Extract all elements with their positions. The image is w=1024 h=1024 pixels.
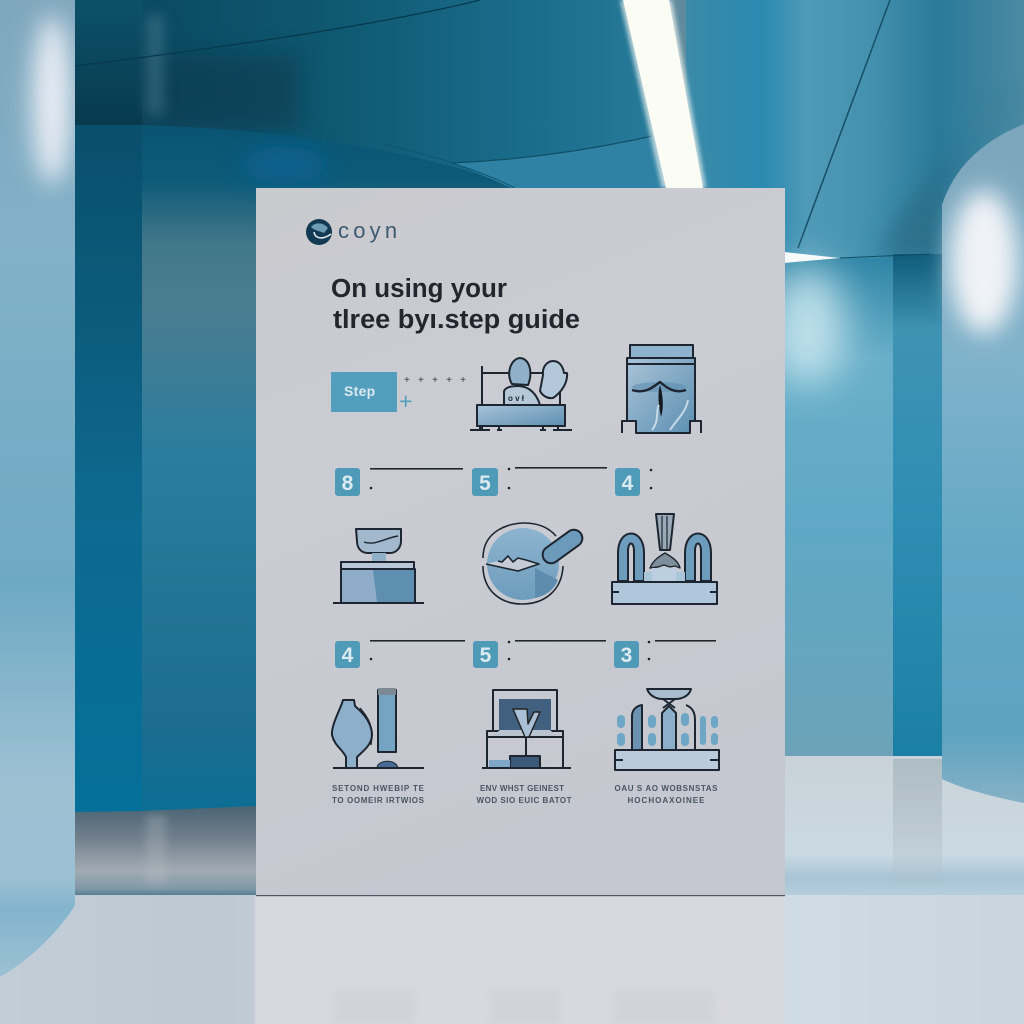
captions <box>332 784 718 805</box>
logo icon <box>306 219 332 245</box>
step row 2 <box>335 640 716 668</box>
logo wordmark: coyn <box>338 218 401 243</box>
icon: vase and bottle <box>332 688 424 768</box>
poster panel <box>256 188 785 896</box>
number 5 <box>473 641 498 668</box>
caption 2: WOD SIO EUIC BATOT <box>476 796 572 805</box>
icon: bench with figures <box>470 358 572 430</box>
icon: circular dish with handle <box>483 523 586 604</box>
left pillar <box>0 0 75 977</box>
floor <box>0 756 1024 1024</box>
icon: bowl on block <box>333 529 424 603</box>
number 5 <box>472 468 498 496</box>
caption 2: ENV WHST GEINEST <box>480 784 564 793</box>
title: On using your <box>331 275 507 303</box>
step row 1 <box>335 467 652 496</box>
number 4: 4 <box>342 644 354 667</box>
number 5: 5 <box>480 644 492 667</box>
number 4 <box>615 468 640 496</box>
caption 3: OAU S AO WOBSNSTAS <box>614 784 718 793</box>
step badge: + <box>399 388 412 414</box>
icon: monitor on stand <box>482 690 571 768</box>
caption 3: HOCHOAXOINEE <box>628 796 705 805</box>
caption 1: TO OOMEIR IRTWIOS <box>332 796 425 805</box>
icon: fork between arches <box>612 514 717 604</box>
floor reflection <box>335 990 715 1024</box>
caption 2 <box>476 784 572 805</box>
logo <box>306 218 401 245</box>
number 8: 8 <box>342 472 354 495</box>
icon: container with curtain <box>622 345 701 433</box>
right curved pillar <box>942 124 1024 803</box>
step badge: +++++ <box>404 375 474 386</box>
number 3 <box>614 641 639 668</box>
caption 1 <box>332 784 425 805</box>
title <box>331 275 580 334</box>
number 5: 5 <box>479 472 491 495</box>
caption 1: SETOND HWEBIP TE <box>332 784 425 793</box>
icon: bench with figures: o v ł <box>508 394 525 403</box>
number 8 <box>335 468 360 496</box>
number 4 <box>335 641 360 668</box>
icon: funnel with columns <box>615 689 719 770</box>
step badge <box>331 372 474 414</box>
number 3: 3 <box>621 644 632 667</box>
number 4: 4 <box>622 472 634 495</box>
caption 3 <box>614 784 718 805</box>
step badge: Step <box>344 383 376 399</box>
title: tlree byı.step guide <box>333 306 580 334</box>
ceiling light strip <box>620 0 930 263</box>
